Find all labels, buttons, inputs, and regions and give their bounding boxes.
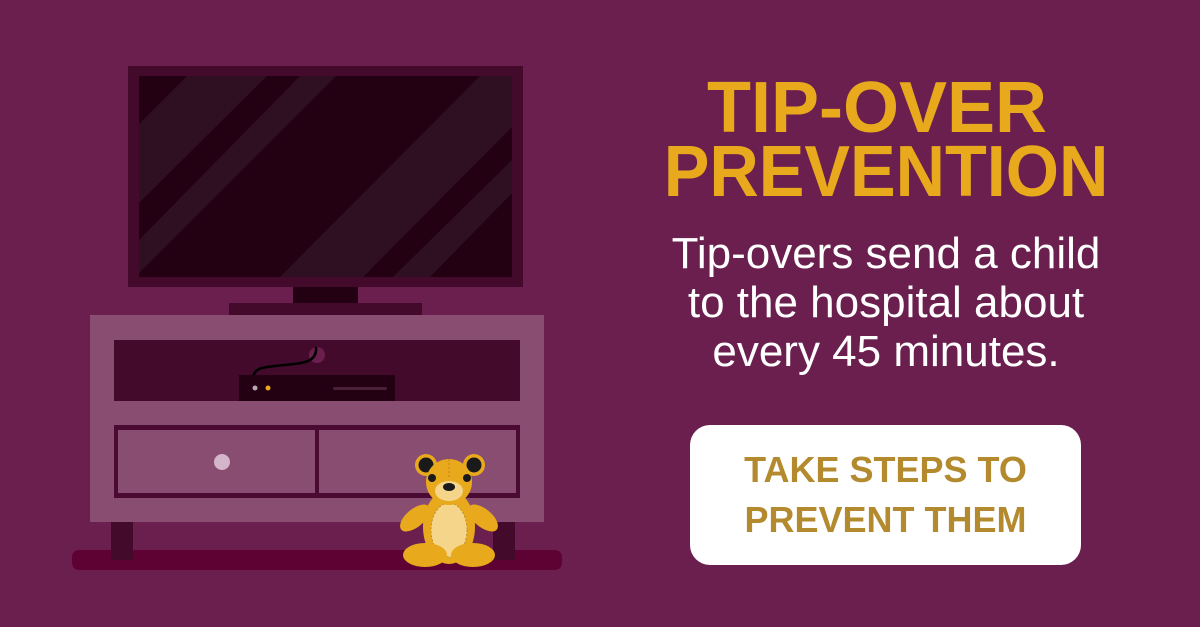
body text: every 45 minutes. [712,327,1060,376]
body text [672,229,1100,376]
floor rug [72,550,562,570]
tv [128,66,523,315]
body text: Tip-overs send a child [672,229,1100,278]
icon: teddy bear [395,454,503,567]
tv cabinet [90,315,544,560]
body text: to the hospital about [688,278,1084,327]
illustration: tv stand scene [72,66,562,570]
title [664,68,1108,212]
title: PREVENTION [664,132,1108,212]
button: take steps [690,425,1081,565]
title: TIP-OVER [707,68,1047,148]
button: take steps: PREVENT THEM [744,499,1027,540]
button: take steps: TAKE STEPS TO [744,449,1027,490]
